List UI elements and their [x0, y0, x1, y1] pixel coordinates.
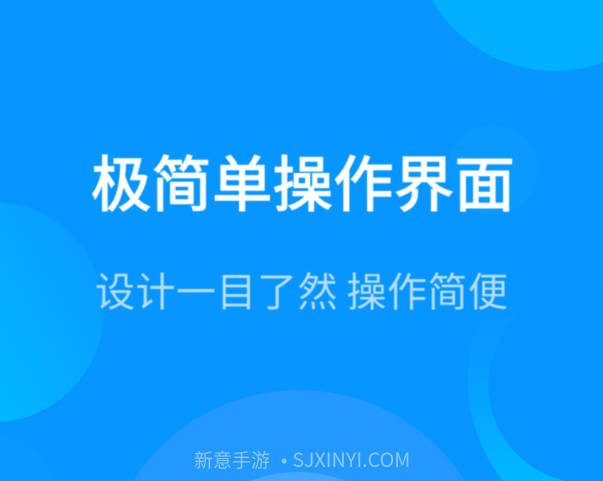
- watermark: 新意手游 • SJXINYI.COM: [194, 444, 410, 473]
- circle: faint behind title: [448, 125, 538, 215]
- crescent: right: [468, 219, 603, 481]
- circle: bottom centre: [133, 390, 465, 481]
- circle: top right: [432, 0, 603, 71]
- circle: left: [0, 202, 103, 422]
- circle: faint bottom left: [0, 435, 53, 481]
- circle: bottom inner: [250, 472, 346, 481]
- title: 极简单操作界面: [91, 137, 515, 224]
- subtitle: 设计一目了然 操作简便: [95, 260, 508, 318]
